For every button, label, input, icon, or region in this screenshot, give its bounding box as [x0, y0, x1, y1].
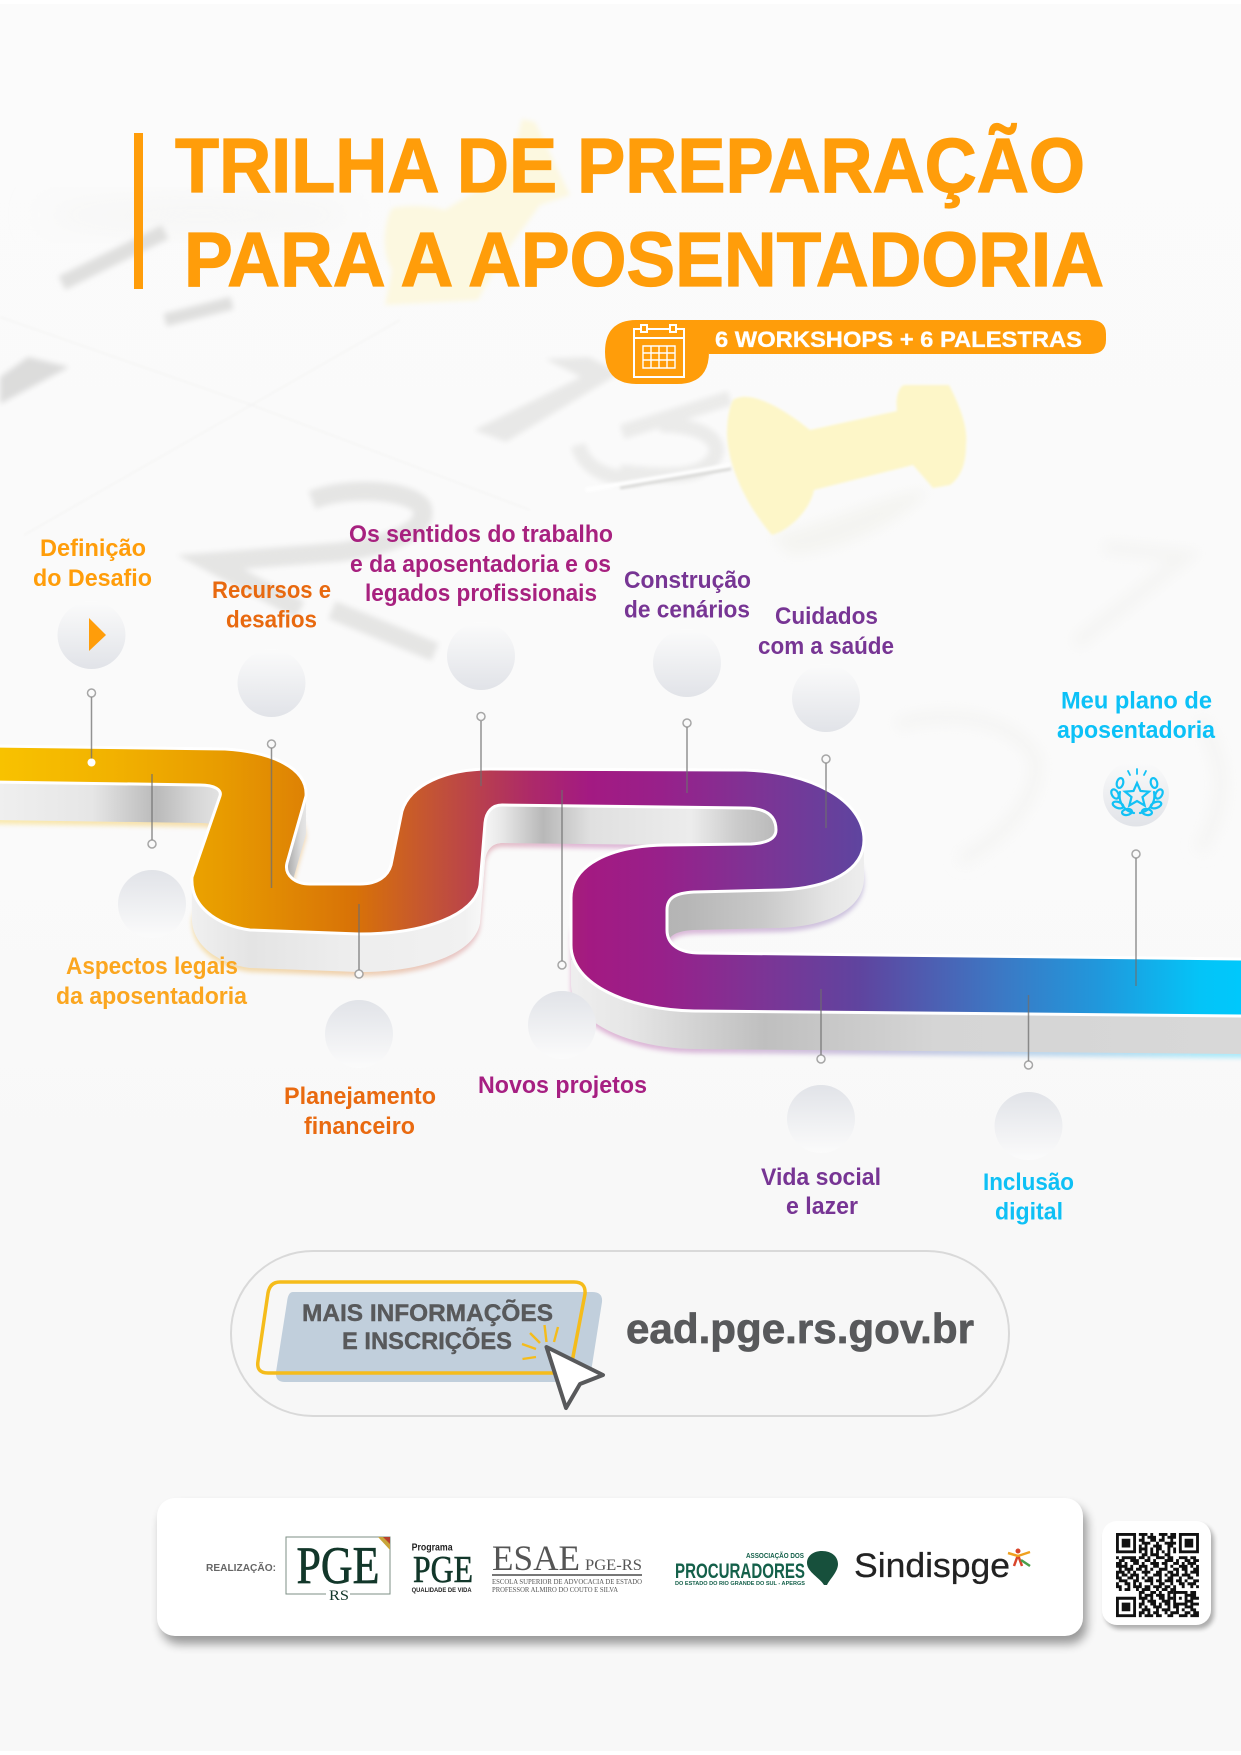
icon: cursor arrow [546, 1347, 603, 1408]
label: Planejamento financeiro [284, 1083, 436, 1140]
realização label: REALIZAÇÃO: [206, 1561, 276, 1574]
logo: PGE RS: PGE [296, 1537, 380, 1595]
label: Os sentidos: e da aposentadoria e os [350, 551, 611, 578]
label: Novos projetos: Novos projetos [478, 1072, 647, 1099]
label: Aspectos legais: da aposentadoria [56, 983, 248, 1010]
label: Inclusão digital [983, 1169, 1074, 1226]
connector pins [88, 689, 1140, 1069]
label: Os sentidos: legados profissionais [365, 580, 597, 607]
call to action panel [231, 1251, 1009, 1416]
label: Meu plano de aposentadoria [1057, 688, 1216, 744]
title line 1: TRILHA DE PREPARAÇÃO [175, 122, 1085, 209]
QR code [1116, 1533, 1199, 1617]
winding road [0, 746, 1241, 1058]
blue parallelogram [276, 1292, 602, 1382]
label: Vida social e lazer: Vida social [761, 1164, 881, 1191]
road colored ground shadow [0, 788, 1241, 1058]
logo: PGE RS: RS [329, 1588, 349, 1604]
label: Recursos e desafios [212, 577, 331, 634]
icon: laurel star [1110, 769, 1164, 816]
logo: Programa PGE: Programa [412, 1543, 453, 1554]
label: Recursos e desafios: desafios [226, 606, 317, 634]
badge: workshops and palestras [605, 320, 1106, 384]
text: mais informações: MAIS INFORMAÇÕES [302, 1299, 553, 1327]
label: Recursos e desafios: Recursos e [212, 577, 331, 604]
label: Os sentidos [349, 521, 613, 607]
label: Inclusão digital: digital [995, 1198, 1063, 1226]
label: Inclusão digital: Inclusão [983, 1169, 1074, 1196]
label: Definição do Desafio: Definição [40, 535, 146, 562]
QR code tile [1102, 1521, 1214, 1629]
label: Meu plano de aposentadoria: Meu plano de [1061, 688, 1212, 715]
background: blurred calendar and push pins [0, 119, 1221, 860]
road surface [0, 746, 1241, 1016]
label: Cuidados com a saúde [758, 603, 894, 660]
title line 2: PARA A APOSENTADORIA [184, 217, 1104, 303]
logo: Sindispge: Sindispge [854, 1547, 1010, 1585]
yellow outline [258, 1282, 585, 1373]
push pin upper [385, 119, 570, 305]
logo: ESAE PGE-RS: ESAE [492, 1538, 580, 1578]
url text: ead.pge.rs.gov.br [626, 1305, 974, 1352]
icon: calendar [634, 325, 684, 377]
logo: ESAE PGE-RS: PGE-RS [585, 1557, 642, 1574]
label: Cuidados com a saúde: com a saúde [758, 633, 894, 660]
label: Definição do Desafio [33, 535, 152, 592]
push pin lower [586, 385, 966, 555]
text: mais informações [302, 1299, 553, 1355]
logo: Associação dos Procuradores: ASSOCIAÇÃO DOS [746, 1551, 804, 1560]
logo: ESAE PGE-RS: ESCOLA SUPERIOR DE ADVOCACIA DE ESTADO [492, 1578, 642, 1586]
badge text: 6 WORKSHOPS + 6 PALESTRAS [715, 327, 1082, 352]
label: Construção de cenários [624, 567, 751, 624]
logo: Programa PGE: PGE [413, 1549, 473, 1591]
bottom white strip [0, 1751, 1241, 1755]
logo: Programa PGE [412, 1543, 473, 1594]
logo: Associação dos Procuradores: DO ESTADO DO RIO GRANDE DO SUL - APERGS [675, 1581, 805, 1587]
top white strip [0, 0, 1241, 4]
label: Definição do Desafio: do Desafio [33, 565, 152, 592]
icon: play triangle [89, 618, 106, 651]
title [134, 122, 1104, 303]
label: Meu plano de aposentadoria: aposentadoria [1057, 717, 1216, 744]
label: Cuidados com a saúde: Cuidados [775, 603, 878, 630]
label: Planejamento financeiro: financeiro [304, 1113, 415, 1140]
label: Construção de cenários: de cenários [624, 597, 750, 624]
logo: ESAE PGE-RS: PROFESSOR ALMIRO DO COUTO E SILVA [492, 1586, 618, 1594]
logos panel [157, 1498, 1087, 1644]
label: Vida social e lazer [761, 1164, 881, 1220]
logo: ESAE PGE-RS [492, 1538, 642, 1594]
step circles [58, 601, 1169, 1160]
label: Aspectos legais: Aspectos legais [66, 953, 238, 980]
label: Construção de cenários: Construção [624, 567, 751, 594]
logo: Associação dos Procuradores: PROCURADORES [675, 1560, 805, 1583]
step labels [33, 521, 1216, 1226]
road side walls [0, 750, 1241, 1054]
logo: Associação dos Procuradores [675, 1551, 838, 1587]
label: Planejamento financeiro: Planejamento [284, 1083, 436, 1110]
click rays [522, 1325, 558, 1359]
label: Os sentidos: Os sentidos do trabalho [349, 521, 613, 548]
label: Vida social e lazer: e lazer [786, 1193, 858, 1220]
title accent bar [134, 133, 143, 289]
logo: Programa PGE: QUALIDADE DE VIDA [412, 1588, 472, 1594]
label: Aspectos legais [56, 953, 248, 1010]
text: mais informações: E INSCRIÇÕES [342, 1327, 512, 1355]
